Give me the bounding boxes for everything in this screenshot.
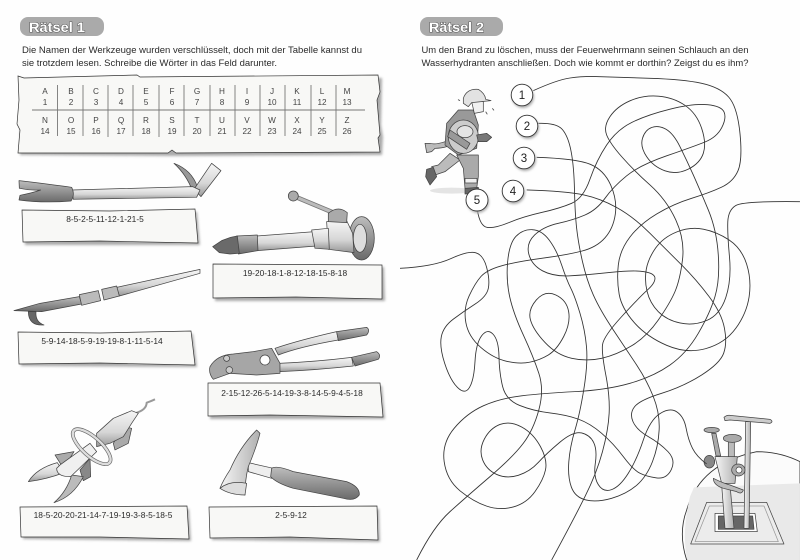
answer box: EINREISSHAKEN (18, 331, 197, 367)
cipher table: F (169, 87, 175, 96)
cipher table: I (246, 87, 248, 96)
number badge 3 (513, 147, 536, 171)
cipher table: L (320, 87, 325, 96)
answer box: BEIL: 2-5-9-12 (275, 510, 307, 520)
cipher table (17, 75, 383, 156)
answer box: BOLZENSCHNEIDER (208, 383, 385, 419)
cipher table: X (294, 116, 300, 125)
panel: Rätsel 1 (14, 17, 385, 542)
hose maze (400, 76, 800, 560)
answer box: BOLZENSCHNEIDER: 2-15-12-26-5-14-19-3-8-14-5-9-4-5-18 (221, 388, 363, 398)
number badge 3: 3 (521, 153, 527, 165)
cipher table: 10 (267, 98, 277, 107)
cipher table: 6 (170, 98, 175, 107)
cipher table: 12 (317, 98, 327, 107)
number badge 4: 4 (510, 186, 517, 198)
icon: pike pole (14, 269, 200, 325)
cipher table: A (42, 87, 48, 96)
number badge 4 (502, 180, 525, 204)
cipher table: J (270, 87, 274, 96)
cipher table: N (42, 116, 48, 125)
instructions: Rätsel 2: Um den Brand zu löschen, muss der Feuerwehrmann seinen Schlauch an den (422, 45, 748, 56)
answer box: STRAHLROHR (213, 264, 385, 301)
answer box: RETTUNGSSCHERE: 18-5-20-20-21-14-7-19-19-3-8-5-18-5 (34, 510, 173, 520)
number badge 5 (466, 189, 489, 213)
cipher table: P (93, 116, 99, 125)
instructions: Rätsel 2: Wasserhydranten anschließen. Doch wie kommt er dorthin? Zeigst du es ihm? (422, 58, 748, 69)
hose line 2 (417, 123, 659, 560)
instructions: Rätsel 1 (22, 45, 362, 69)
cipher table: 16 (91, 127, 101, 136)
hose line 5 (477, 104, 725, 560)
cipher table: 17 (116, 127, 126, 136)
number badge 2: 2 (524, 121, 530, 133)
cipher table: Q (118, 116, 124, 125)
cipher table: 26 (342, 127, 352, 136)
heading: Rätsel 1 (20, 17, 104, 36)
hose line 3 (444, 96, 719, 509)
answer box: STRAHLROHR: 19-20-18-1-8-12-18-15-8-18 (243, 268, 347, 278)
cipher table: 20 (192, 127, 202, 136)
panel: Rätsel 2 (400, 17, 800, 560)
answer box: EINREISSHAKEN: 5-9-14-18-5-9-19-19-8-1-11-5-14 (41, 336, 163, 346)
cipher table: W (268, 116, 276, 125)
answer box: RETTUNGSSCHERE (20, 506, 191, 541)
cipher table: 25 (317, 127, 327, 136)
icon: fire axe hammer (220, 430, 359, 499)
cipher table: 13 (342, 98, 352, 107)
cipher table: 23 (267, 127, 277, 136)
cipher table: 14 (40, 127, 50, 136)
cipher table: 11 (293, 98, 302, 107)
number badge 2 (516, 115, 539, 139)
cipher table: H (219, 87, 225, 96)
instructions: Rätsel 1: Die Namen der Werkzeuge wurden verschlüsselt, doch mit der Tabelle kannst du (22, 45, 362, 56)
cipher table: 9 (245, 98, 250, 107)
icon: bolt cutter (210, 327, 380, 379)
icon: Halligan tool (19, 163, 221, 202)
cipher table: R (143, 116, 149, 125)
cipher table: 3 (94, 98, 99, 107)
cipher table: O (68, 116, 74, 125)
heading: Rätsel 2: Rätsel 2 (429, 19, 484, 35)
number badge 5: 5 (474, 195, 480, 207)
cipher table: 24 (292, 127, 302, 136)
cipher table: T (194, 116, 200, 125)
cipher table: 18 (141, 127, 151, 136)
cipher table: B (68, 87, 74, 96)
cipher table: 5 (144, 98, 149, 107)
heading: Rätsel 1: Rätsel 1 (29, 19, 85, 35)
cipher table: C (93, 87, 99, 96)
cipher table: K (294, 87, 300, 96)
number badge 1 (511, 84, 534, 108)
cipher table: 1 (43, 98, 48, 107)
cipher table: V (244, 116, 250, 125)
icon: hydrant scene (682, 415, 800, 560)
number badge 1: 1 (519, 90, 525, 102)
cipher table: U (219, 116, 225, 125)
cipher table: S (169, 116, 175, 125)
cipher table: Z (344, 116, 350, 125)
cipher table: 22 (242, 127, 252, 136)
cipher table: 7 (195, 98, 200, 107)
cipher table: D (118, 87, 124, 96)
cipher table: M (344, 87, 351, 96)
answer box: BEIL (209, 506, 380, 542)
heading: Rätsel 2 (420, 17, 503, 36)
instructions: Rätsel 1: sie trotzdem lesen. Schreibe die Wörter in das Feld darunter. (22, 58, 277, 69)
cipher table: 4 (119, 98, 124, 107)
cipher table: 19 (167, 127, 177, 136)
icon: hydraulic rescue cutter (28, 399, 155, 503)
hose line 1 (533, 76, 800, 351)
cipher table: 15 (66, 127, 76, 136)
hose line 4 (400, 190, 726, 478)
cipher table: E (143, 87, 149, 96)
answer box: HEBEKLAUE (22, 209, 200, 245)
cipher table: 8 (220, 98, 225, 107)
cipher table: Y (319, 116, 325, 125)
instructions: Rätsel 2 (422, 45, 748, 69)
answer box: HEBEKLAUE: 8-5-2-5-11-12-1-21-5 (66, 214, 144, 224)
cipher table: 21 (217, 127, 227, 136)
cipher table: G (194, 87, 200, 96)
cipher table: 2 (69, 98, 74, 107)
icon: running firefighter (425, 89, 494, 194)
icon: fire hose nozzle (213, 191, 374, 260)
